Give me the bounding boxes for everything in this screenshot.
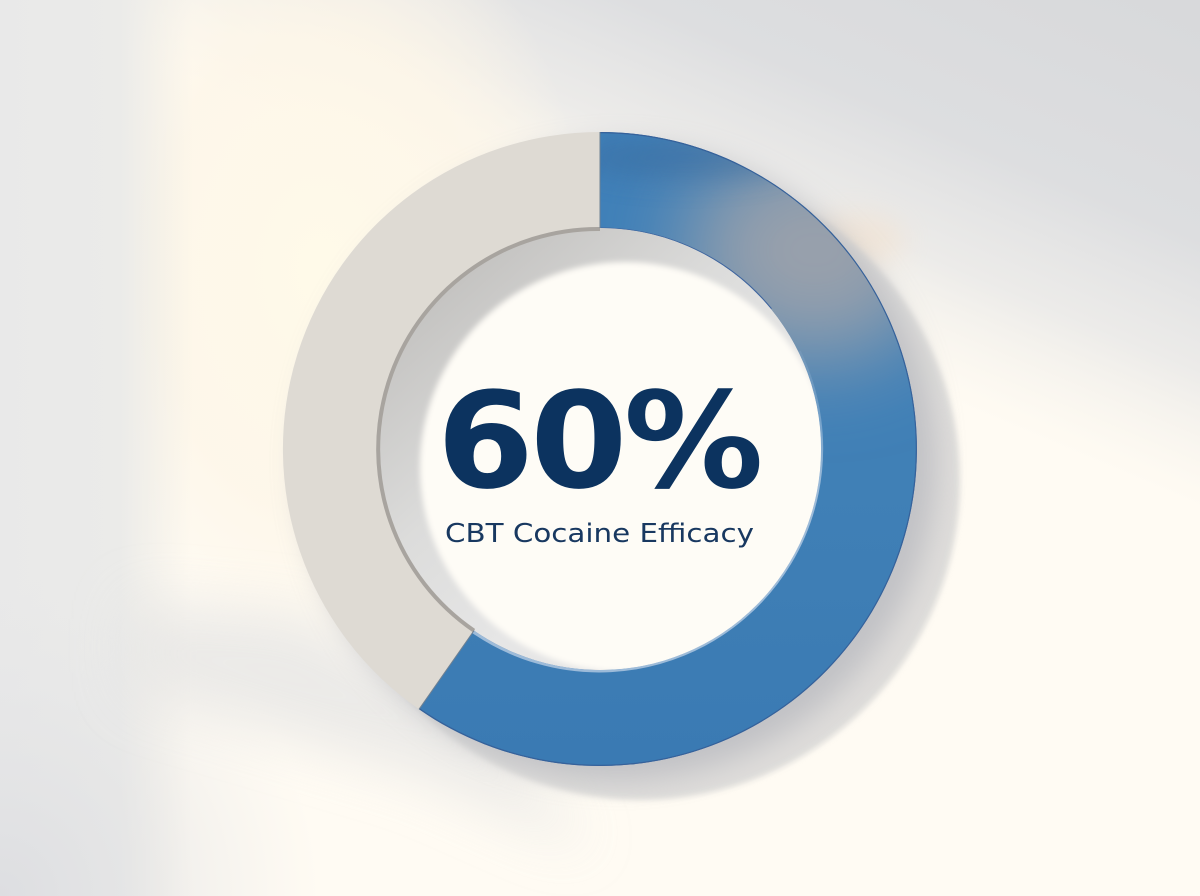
big value: 60%: % bbox=[624, 364, 764, 519]
big value: 60%: 6 bbox=[437, 364, 534, 519]
warm glow beside ring bbox=[805, 214, 905, 266]
segment divider bbox=[419, 132, 600, 709]
caption: CBT Cocaine Efficacy bbox=[445, 519, 754, 549]
remainder segment: 40% bbox=[283, 132, 600, 709]
big value: 60%: 0 bbox=[530, 364, 627, 519]
donut chart bbox=[283, 132, 945, 766]
hole edge bbox=[378, 229, 600, 631]
centre hole with cast shadow bbox=[379, 228, 830, 672]
value segment: 60% bbox=[419, 132, 917, 766]
ring drop shadow bbox=[300, 144, 960, 800]
